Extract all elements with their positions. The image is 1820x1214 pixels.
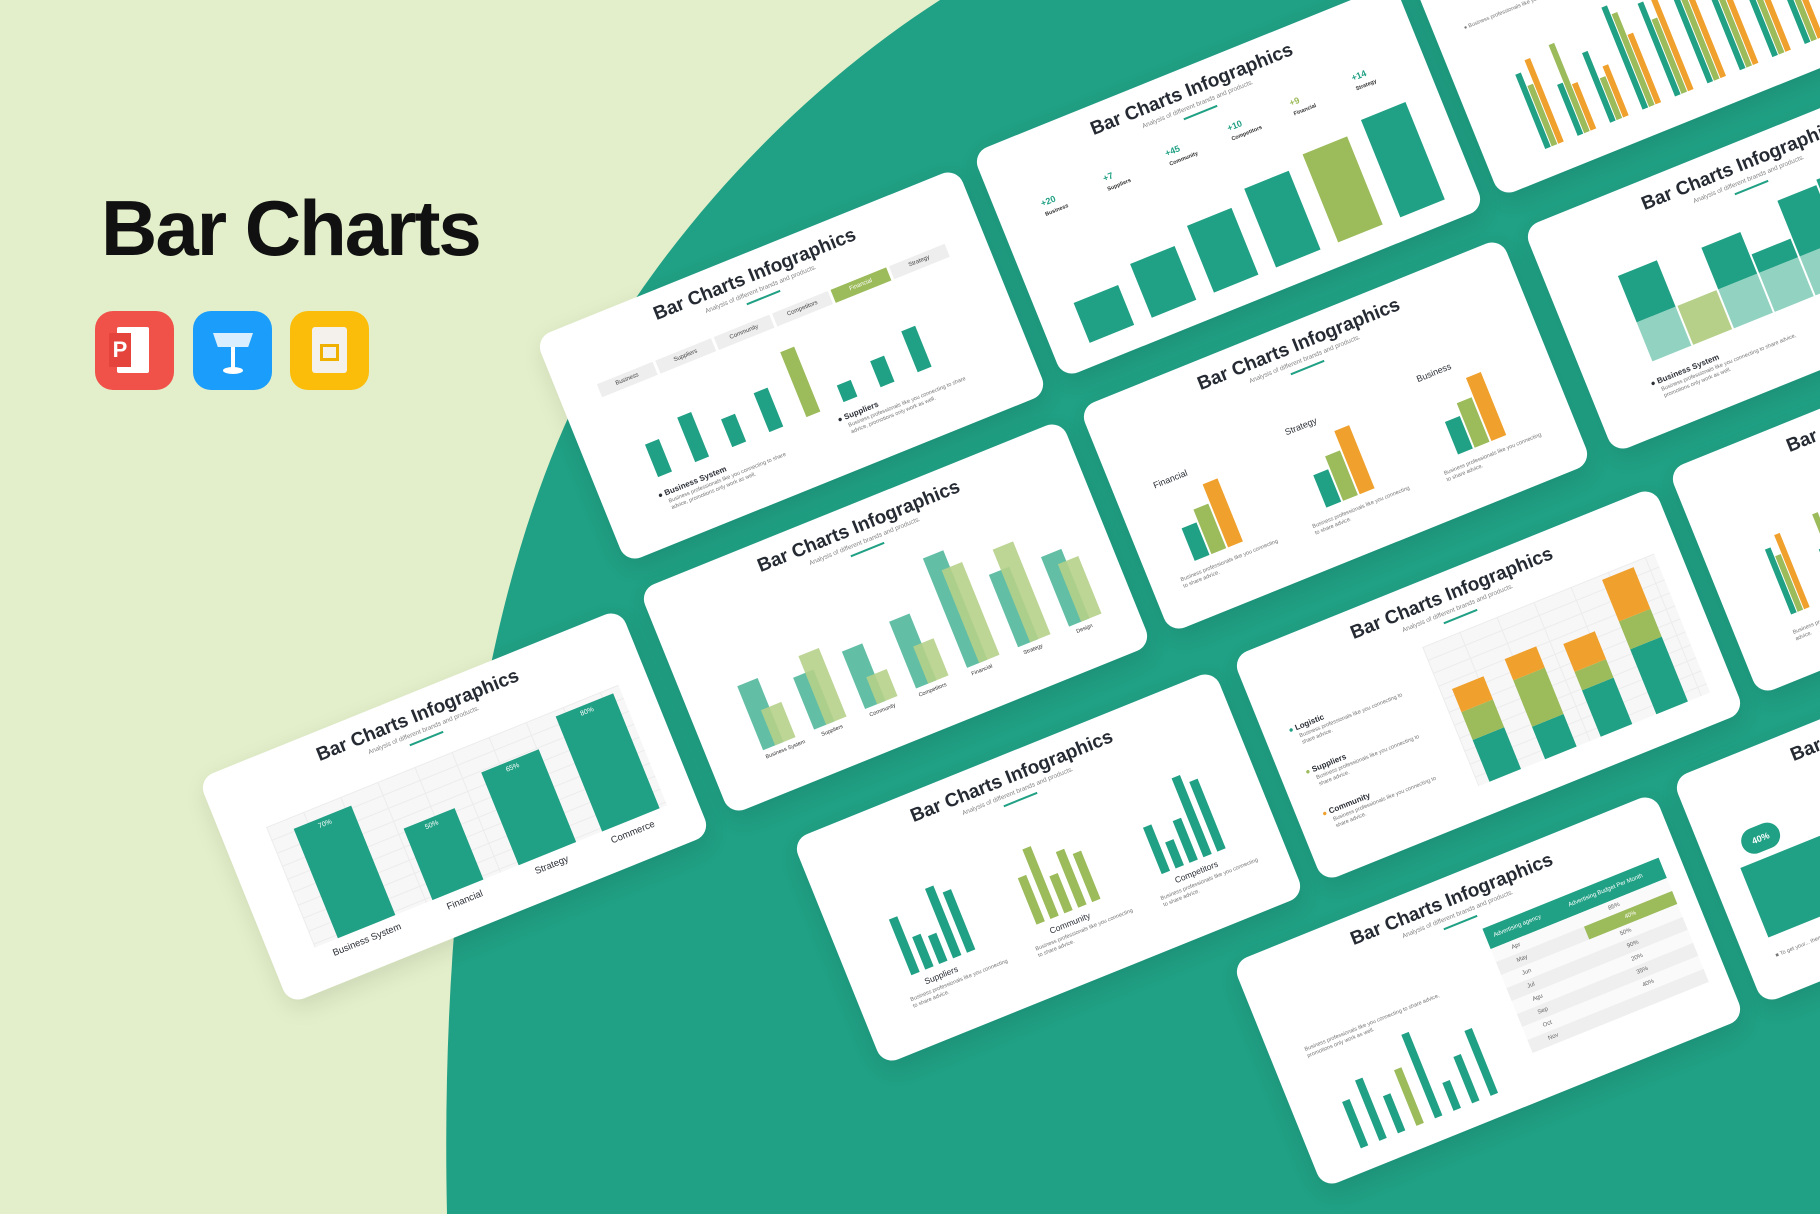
grouped bars (1515, 0, 1820, 149)
group: competitors: Competitors (1173, 859, 1219, 885)
value labels: +45 (1163, 143, 1181, 158)
legend: ● Business System (1649, 352, 1720, 388)
card 2: tabs bar chart: Analysis of different brands and products. (704, 264, 817, 315)
mini chart: financial: Business professionals like you connecting to share advice. (1180, 538, 1279, 590)
category labels: Strategy (533, 854, 570, 877)
chart (1422, 553, 1710, 786)
icons row (95, 311, 369, 390)
card title: Bar Charts Infographics (1348, 849, 1556, 950)
group: suppliers: Suppliers (923, 964, 959, 986)
icon: powerpoint (95, 311, 174, 390)
card 11: table and bars (1232, 793, 1745, 1188)
card title: Bar Charts Infographics (314, 665, 522, 766)
card title: Bar Charts Infographics (1088, 39, 1296, 140)
value labels: +10 (1226, 118, 1244, 133)
icon: powerpoint: P (113, 337, 127, 362)
category labels (765, 623, 1094, 760)
table (1482, 858, 1708, 1053)
group: community: Business professionals like you connecting to share advice. (1035, 908, 1134, 959)
table: Apr 85% (1511, 902, 1621, 951)
mini chart: business: Business (1415, 361, 1453, 384)
value labels: Business (1044, 203, 1069, 218)
grouped bars (1764, 512, 1820, 614)
card 4: grouped monthly bars (top right) (1409, 0, 1820, 197)
group: suppliers: Business professionals like you connecting to share advice. (910, 958, 1009, 1010)
legend: business system: Business professionals like you connecting to share advice, promotions only work as well. (668, 452, 787, 511)
bars: 70% (317, 818, 333, 830)
table: 40% (1624, 910, 1637, 920)
legend (1287, 692, 1437, 829)
table: Jun 50% (1521, 927, 1633, 977)
category labels: Commerce (609, 819, 657, 846)
category labels: Suppliers (821, 724, 844, 738)
group: competitors: Business professionals like you connecting to share advice. (1160, 857, 1259, 908)
card 7: stacked bars: Analysis of different brands and products. (1692, 154, 1805, 205)
tabs: Competitors (786, 300, 819, 318)
bars: 65% (505, 762, 521, 774)
category labels: Strategy (1023, 643, 1044, 656)
table: Jul 90% (1526, 939, 1640, 990)
bars (1074, 102, 1445, 343)
card 6: three mini charts: Analysis of different brands and products. (1248, 334, 1361, 385)
stacked bars (1618, 178, 1820, 362)
card title: Bar Charts Infographics (1195, 294, 1403, 395)
tabs: Business (615, 372, 640, 387)
mini chart: strategy: Strategy (1283, 415, 1318, 437)
card 5: overlapping bars (639, 420, 1152, 815)
mini chart: financial: Financial (1152, 468, 1189, 490)
table: May (1516, 954, 1529, 964)
legend: ● Community (1321, 791, 1372, 818)
tabs (597, 244, 950, 397)
chart grid (266, 685, 667, 948)
card 10: grouped bars (right edge) (1668, 300, 1820, 695)
value labels: Strategy (1355, 79, 1378, 92)
card title (1414, 0, 1820, 5)
group: community: Community (1048, 910, 1092, 936)
bars: 80% (579, 706, 595, 718)
mini chart: business (1415, 361, 1542, 483)
mini chart: business: Business professionals like you connecting to share advice. (1443, 432, 1542, 483)
tabs: Suppliers (673, 348, 698, 363)
40% badge (1737, 819, 1784, 858)
bar chart (1342, 1028, 1498, 1148)
card 5: overlapping bars: Analysis of different brands and products. (808, 516, 921, 567)
mini chart: financial (1152, 468, 1279, 590)
card 3: growth bar chart: Analysis of different brands and products. (1141, 79, 1254, 130)
group: community (1018, 846, 1134, 959)
card 7: stacked bars (1523, 58, 1820, 453)
card title: Bar Charts Infographics (908, 726, 1116, 827)
card title: Bar Charts Infographics (651, 224, 859, 325)
legend: ● Suppliers (1304, 752, 1348, 777)
legend: business system: ● Business System (656, 464, 728, 500)
card 11: table and bars: Analysis of different brands and products. (1401, 889, 1514, 940)
group: suppliers (888, 886, 1009, 1010)
category labels: Competitors (918, 682, 948, 699)
card 8: three bar groups: Analysis of different brands and products. (961, 766, 1074, 817)
card 1: four bar chart (198, 609, 711, 1004)
legend: Business professionals like you connecting to share advice. (1332, 776, 1437, 829)
category labels: Business System (331, 921, 403, 959)
value labels: Financial (1293, 103, 1317, 117)
card 9: stepped blocks chart (1232, 487, 1745, 882)
title: Bar Charts (101, 184, 480, 272)
legend: ● Logistic (1287, 712, 1325, 735)
legend: Business professionals like you connecting to share advice, promotions only work as well. (1661, 333, 1797, 399)
tabs: Strategy (908, 255, 931, 269)
table: Agu 20% (1532, 953, 1644, 1003)
value labels: Competitors (1231, 125, 1263, 143)
icon: keynote (193, 311, 272, 390)
value labels: +7 (1101, 170, 1115, 183)
table: Oct 40% (1542, 979, 1655, 1029)
40% badge: 40% (1750, 830, 1771, 846)
description: Business professionals like you connecting to share advice, promotions only work as well. (1304, 993, 1440, 1059)
value labels (1039, 68, 1378, 218)
category labels: Business System (765, 739, 806, 760)
category labels: Financial (971, 663, 993, 677)
card 12: percentage bar (right edge) (1672, 609, 1820, 1004)
card 9: stepped blocks chart: Analysis of different brands and products. (1401, 583, 1514, 634)
mini chart: strategy (1283, 415, 1411, 536)
bars (294, 693, 660, 938)
table: Advertising agency Advertising Budget Per Month (1493, 873, 1644, 939)
value labels: +9 (1288, 95, 1301, 108)
icon: google slides (290, 311, 369, 390)
value labels: +20 (1039, 194, 1057, 209)
legend: suppliers: Business professionals like you connecting to share advice, promotions only work as well. (848, 376, 967, 435)
card 1: four bar chart: Analysis of different brands and products. (367, 705, 480, 756)
legend: suppliers: ● Suppliers (836, 400, 880, 424)
category labels: Financial (445, 888, 485, 913)
card 3: growth bar chart (972, 0, 1485, 378)
category labels: Design (1076, 623, 1094, 635)
mini chart: strategy: Business professionals like you connecting to share advice. (1312, 485, 1411, 536)
card 2: tabs bar chart (535, 168, 1048, 563)
card title: Bar Charts Infographics (755, 476, 963, 577)
card title: Bar Charts Infographics (1348, 543, 1556, 644)
card 6: three mini charts (1079, 238, 1592, 633)
legend: Business professionals like you connecting to share advice. (1315, 734, 1420, 787)
category labels: Community (869, 703, 897, 719)
table: Sep 35% (1537, 966, 1649, 1016)
bars (645, 326, 932, 478)
tabs: Financial (849, 278, 873, 292)
bars: 50% (424, 819, 440, 831)
overlapping bars (737, 542, 1102, 750)
big bar (1740, 823, 1820, 938)
value labels: +14 (1350, 68, 1368, 83)
table: Nov (1547, 1032, 1560, 1042)
legend: Business professionals like you connecting to share advice. (1299, 692, 1403, 746)
value labels: Suppliers (1107, 178, 1132, 193)
card 8: three bar groups (792, 670, 1305, 1065)
category labels (331, 819, 657, 959)
group: competitors (1143, 775, 1259, 908)
value labels: Community (1169, 151, 1199, 168)
tabs: Community (729, 324, 759, 341)
